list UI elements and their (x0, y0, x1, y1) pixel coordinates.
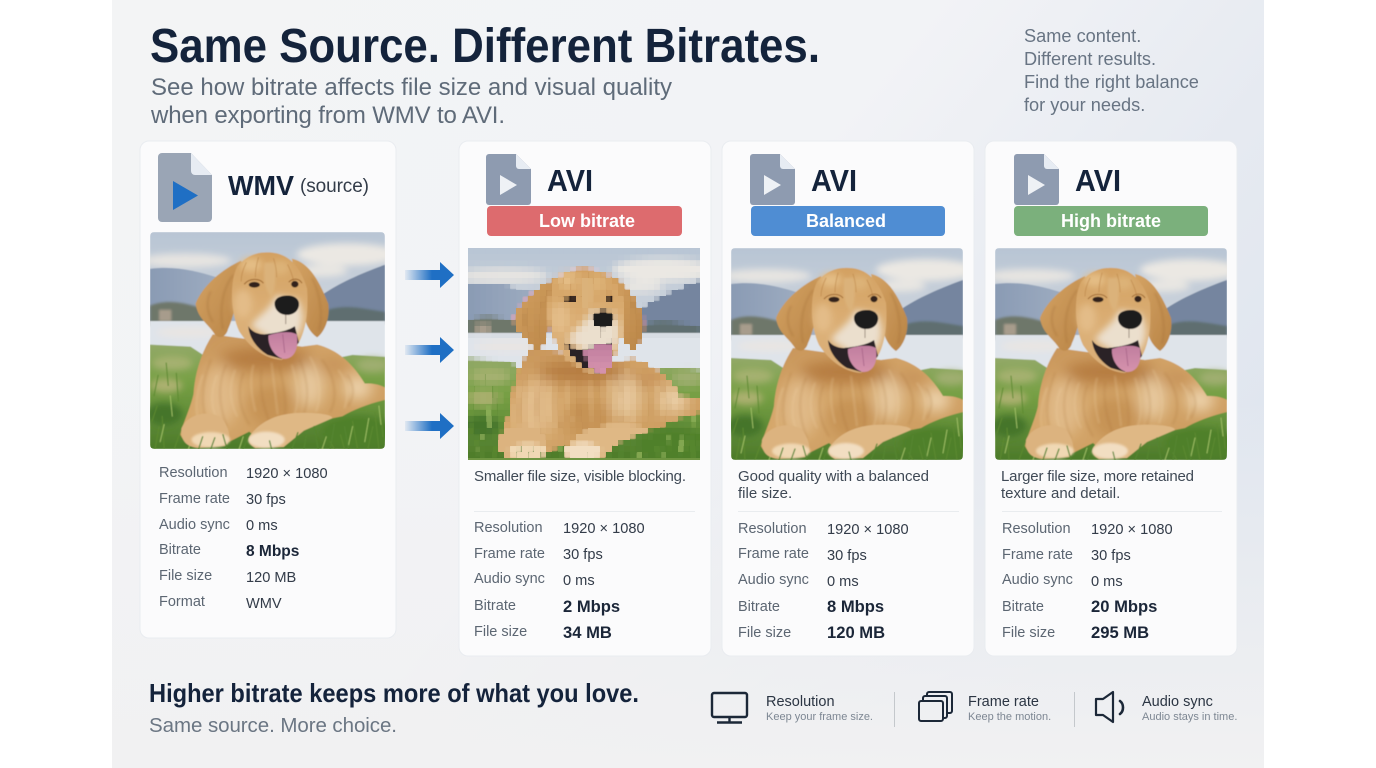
spec table: high: Bitrate (1002, 599, 1044, 615)
spec table: balanced: 0 ms (827, 574, 859, 590)
heading: WMV: (source) (300, 176, 369, 197)
spec table: low: Frame rate (474, 546, 545, 562)
icon: AVI file (750, 154, 795, 205)
spec table: balanced: 8 Mbps (827, 597, 884, 616)
spec table: source: Format (159, 594, 205, 610)
spec table: low: Audio sync (474, 571, 545, 587)
spec table: source: Resolution (159, 465, 228, 481)
caption: high: Larger file size, more retained (1001, 468, 1194, 485)
heading: WMV: WMV (228, 170, 294, 201)
caption: balanced (738, 468, 929, 502)
footer subline: Same source. More choice. (149, 714, 397, 737)
spec table: source: 1920 × 1080 (246, 466, 328, 482)
spec table: low: 1920 × 1080 (563, 521, 645, 537)
panel: WMV source (140, 141, 398, 638)
badge: low bitrate: Low bitrate (539, 211, 635, 231)
feature: resolution (712, 693, 873, 723)
icon: speaker (1096, 692, 1123, 722)
spec table: source: Bitrate (159, 542, 201, 558)
feature: audio sync: Audio stays in time. (1142, 711, 1237, 723)
spec table: balanced: 120 MB (827, 623, 885, 642)
side note: Find the right balance (1024, 72, 1199, 92)
icon: WMV file (158, 153, 212, 222)
spec table: source: 0 ms (246, 518, 278, 534)
feature: frame rate: Frame rate (968, 694, 1039, 710)
spec table: high: 20 Mbps (1091, 597, 1157, 616)
heading: AVI: AVI (1075, 163, 1121, 198)
icon: AVI file (486, 154, 531, 205)
image: balanced dog photo (721, 248, 976, 460)
arrows: source to outputs (405, 262, 454, 439)
feature: frame rate: Keep the motion. (968, 711, 1051, 723)
spec table: balanced (738, 521, 909, 642)
spec table: high: Resolution (1002, 521, 1071, 537)
spec table: source: 30 fps (246, 492, 286, 508)
spec table: high: 30 fps (1091, 548, 1131, 564)
title: Same Source. Different Bitrates. (150, 20, 820, 73)
spec table: source (159, 465, 328, 612)
subtitle (150, 74, 672, 129)
image: high quality dog photo (985, 248, 1240, 460)
badge: balanced: Balanced (806, 211, 886, 231)
caption: balanced: Good quality with a balanced (738, 468, 929, 485)
spec table: low: 30 fps (563, 547, 603, 563)
badge: high bitrate: High bitrate (1061, 211, 1161, 231)
feature: resolution: Keep your frame size. (766, 711, 873, 723)
panel: AVI low bitrate (458, 141, 713, 656)
feature: audio sync (1096, 692, 1237, 723)
spec table: low: File size (474, 624, 527, 640)
feature: audio sync: Audio sync (1142, 694, 1213, 710)
spec table: balanced: Audio sync (738, 572, 809, 588)
spec table: low: 2 Mbps (563, 597, 620, 616)
side note: Same content. (1024, 26, 1141, 46)
spec table: low: 34 MB (563, 623, 612, 642)
spec table: high: Frame rate (1002, 547, 1073, 563)
heading: AVI: AVI (547, 163, 593, 198)
side note (1024, 26, 1199, 115)
image: pixelated dog photo (458, 248, 713, 460)
panel: AVI high bitrate (985, 141, 1240, 656)
footer headline: Higher bitrate keeps more of what you love. (149, 678, 639, 708)
badge: high bitrate (1014, 206, 1208, 236)
spec table: balanced: 30 fps (827, 548, 867, 564)
caption: high: texture and detail. (1001, 485, 1120, 502)
spec table: source: File size (159, 568, 212, 584)
icon: AVI file (1014, 154, 1059, 205)
heading: AVI: AVI (811, 163, 857, 198)
icon: stacked frames (919, 692, 952, 721)
badge: low bitrate (487, 206, 682, 236)
spec table: high: 1920 × 1080 (1091, 522, 1173, 538)
spec table: high: File size (1002, 625, 1055, 641)
icon: monitor (712, 693, 747, 722)
spec table: balanced: 1920 × 1080 (827, 522, 909, 538)
badge: balanced (751, 206, 945, 236)
spec table: balanced: Resolution (738, 521, 807, 537)
spec table: balanced: Frame rate (738, 546, 809, 562)
spec table: low: Resolution (474, 520, 543, 536)
caption: high (1001, 468, 1194, 502)
spec table: high: 0 ms (1091, 574, 1123, 590)
spec table: high: Audio sync (1002, 572, 1073, 588)
spec table: high (1002, 521, 1173, 642)
panel: AVI balanced (721, 141, 976, 656)
subtitle: See how bitrate affects file size and visual quality (151, 74, 672, 101)
caption: low: Smaller file size, visible blocking. (474, 468, 686, 485)
spec table: low (474, 520, 645, 642)
spec table: low: 0 ms (563, 573, 595, 589)
feature: frame rate (919, 692, 1051, 723)
spec table: low: Bitrate (474, 598, 516, 614)
side note: for your needs. (1024, 95, 1145, 115)
spec table: source: Frame rate (159, 491, 230, 507)
spec table: source: 8 Mbps (246, 543, 299, 560)
spec table: source: Audio sync (159, 517, 230, 533)
caption: balanced: file size. (738, 485, 792, 502)
spec table: source: WMV (246, 596, 282, 612)
image: source dog photo (140, 232, 398, 449)
spec table: high: 295 MB (1091, 623, 1149, 642)
heading: WMV (228, 170, 369, 201)
spec table: source: 120 MB (246, 570, 296, 586)
spec table: balanced: Bitrate (738, 599, 780, 615)
side note: Different results. (1024, 49, 1156, 69)
spec table: balanced: File size (738, 625, 791, 641)
feature: resolution: Resolution (766, 694, 835, 710)
subtitle: when exporting from WMV to AVI. (150, 102, 505, 129)
